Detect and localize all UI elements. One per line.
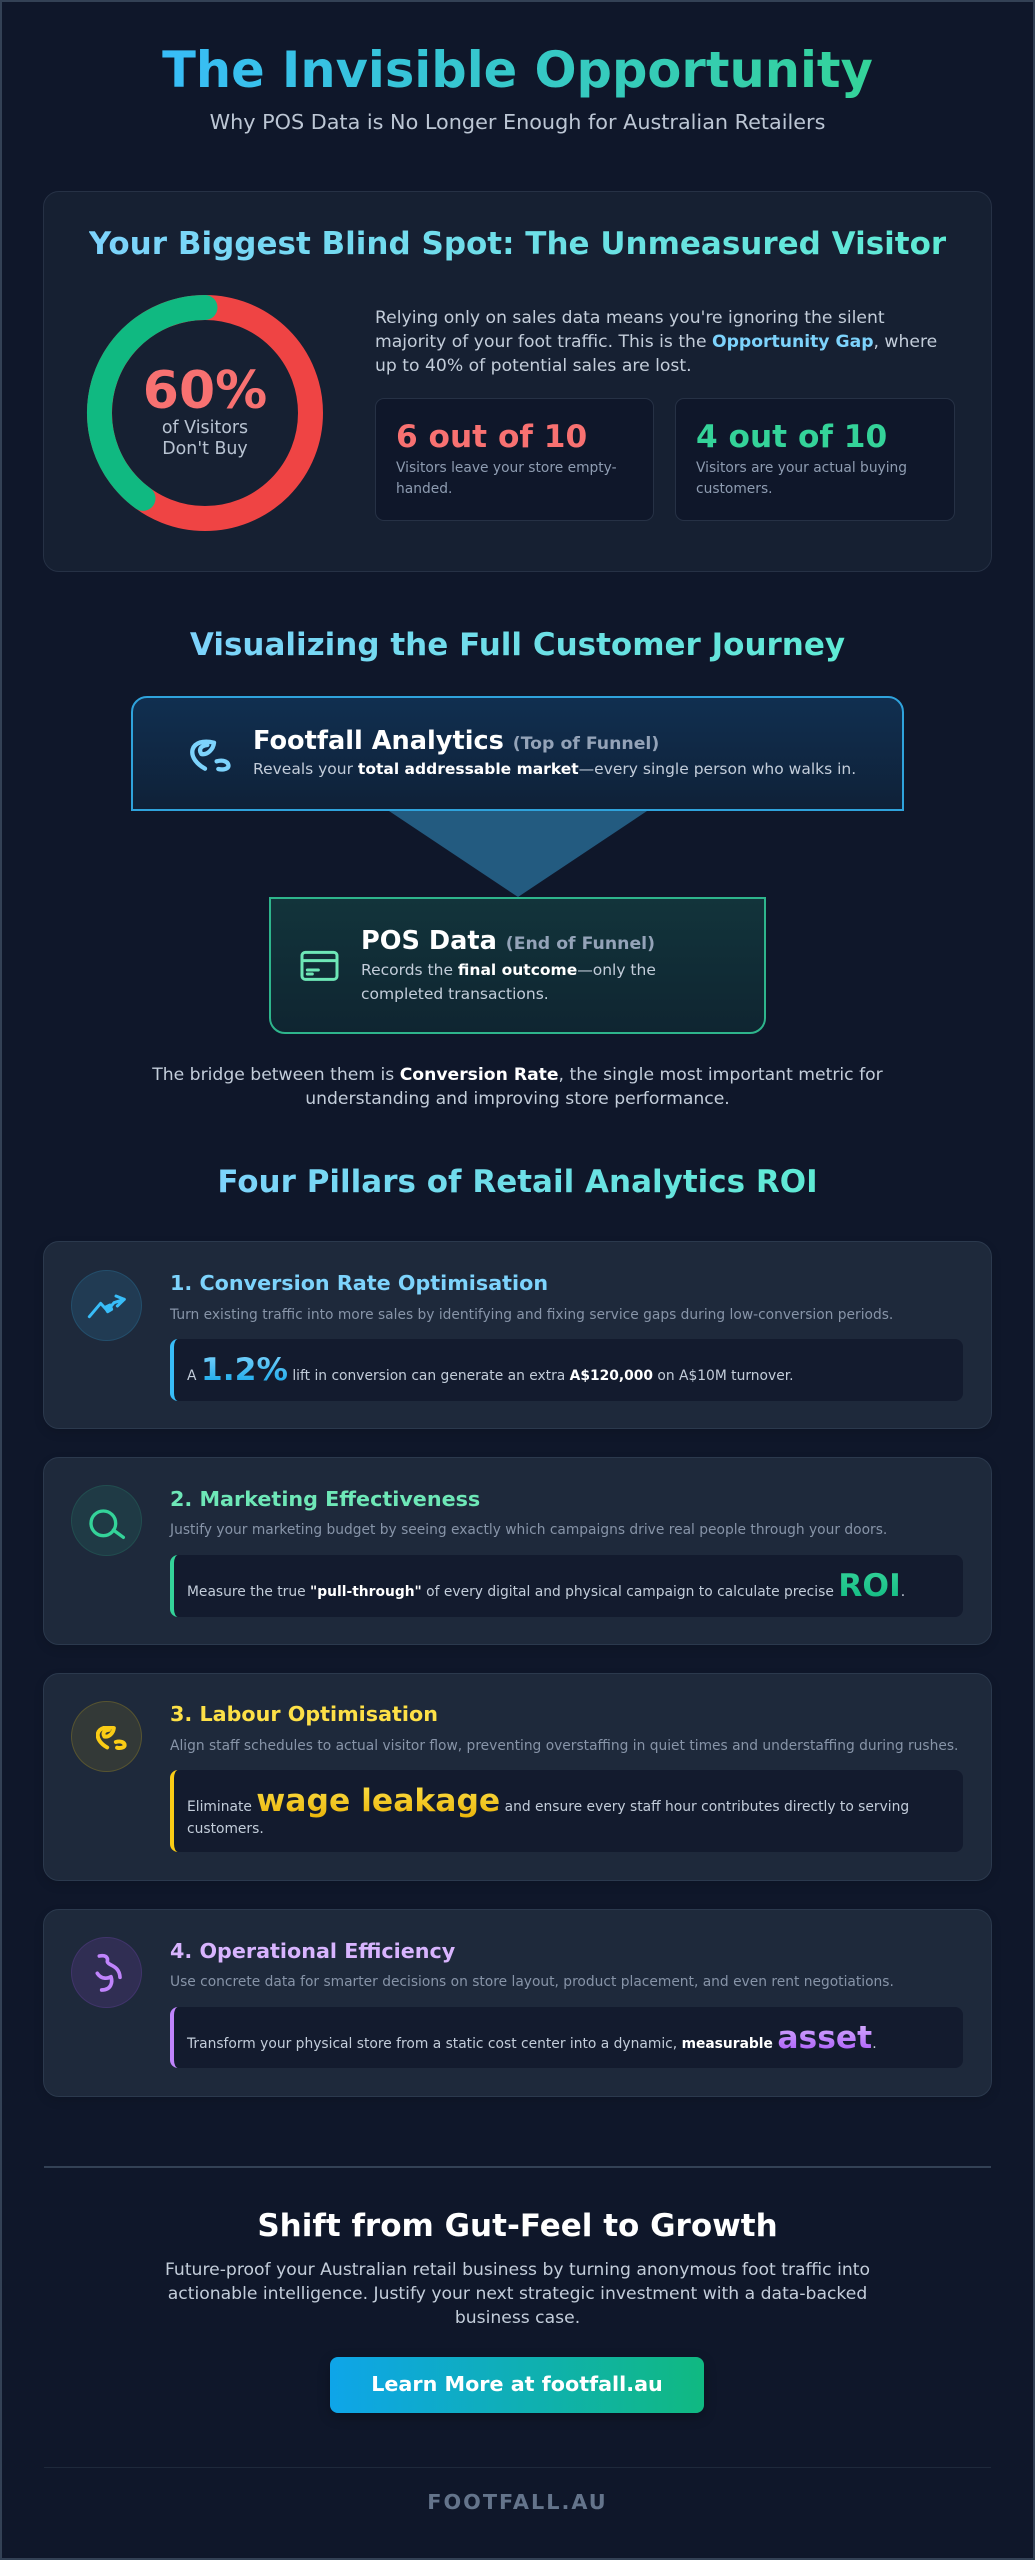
stat note: buying customers: Visitors are your actual buying	[696, 460, 907, 476]
donut chart	[86, 295, 323, 531]
heading: blind spot: Your Biggest Blind Spot: The Unmeasured Visitor	[89, 226, 946, 262]
heading: customer journey: Visualizing the Full Customer Journey	[190, 627, 845, 663]
icon: trend up	[88, 1294, 126, 1318]
pillar 3 icon circle	[71, 1701, 142, 1772]
pillar 1 icon circle	[71, 1270, 142, 1341]
stat card: 6 out of 10	[375, 398, 654, 521]
pillar 2 icon circle	[71, 1485, 142, 1556]
pillar 2 title: 2. Marketing Effectiveness	[170, 1487, 480, 1511]
panel: blind spot	[43, 191, 992, 572]
button	[330, 2357, 704, 2413]
footer brand: FOOTFALL.AU	[427, 2490, 608, 2514]
bridge text: The bridge between them is Conversion Rate, the single most important metric for	[152, 1065, 883, 1085]
funnel top description: Reveals your total addressable market—every single person who walks in.	[253, 760, 856, 778]
heading: four pillars: Four Pillars of Retail Analytics ROI	[217, 1164, 818, 1200]
donut label: of Visitors	[162, 418, 248, 438]
pillar 1 title: 1. Conversion Rate Optimisation	[170, 1271, 548, 1295]
button: Learn More at footfall.au	[371, 2372, 663, 2396]
icon: route	[95, 1954, 122, 1992]
pillar 3 title: 3. Labour Optimisation	[170, 1702, 438, 1726]
bridge text	[152, 1065, 883, 1109]
pillar 2 callout text: Measure the true "pull-through" of every digital and physical campaign to calculate precise ROI.	[187, 1568, 905, 1604]
closing paragraph: business case.	[455, 2308, 580, 2328]
pillar 4 description: Use concrete data for smarter decisions on store layout, product placement, and even rent negotiations.	[170, 1974, 894, 1990]
funnel bottom description	[361, 961, 656, 1003]
stat card: 4 out of 10	[675, 398, 955, 521]
funnel top: footfall analytics	[131, 696, 904, 811]
pillar 4 callout box	[170, 2007, 963, 2068]
closing paragraph: actionable intelligence. Justify your next strategic investment with a data-backed	[168, 2284, 867, 2304]
pillar 1 callout box	[170, 1339, 963, 1401]
pillar 3 callout text	[187, 1783, 909, 1837]
funnel top title: Footfall Analytics (Top of Funnel)	[253, 726, 659, 756]
pillar 3 card	[43, 1673, 992, 1881]
pillar 3 callout box	[170, 1770, 963, 1852]
intro paragraph	[375, 308, 937, 376]
funnel bottom description: Records the final outcome—only the	[361, 961, 656, 979]
intro paragraph: up to 40% of potential sales are lost.	[375, 356, 692, 376]
pillar 4 title: 4. Operational Efficiency	[170, 1939, 455, 1963]
stat value: 6 out of 10: 6 out of 10	[396, 419, 587, 455]
pillar 4 callout text: Transform your physical store from a static cost center into a dynamic, measurable asset.	[187, 2020, 877, 2056]
icon: footprints	[190, 740, 231, 772]
bridge text: understanding and improving store performance.	[305, 1089, 730, 1109]
stat note: empty-handed: handed.	[396, 481, 452, 497]
stat note: empty-handed: Visitors leave your store empty-	[396, 460, 617, 476]
closing paragraph	[165, 2260, 870, 2328]
pillar 2 callout box	[170, 1555, 963, 1617]
icon: credit card	[300, 950, 338, 981]
subtitle: Why POS Data is No Longer Enough for Australian Retailers	[210, 110, 825, 134]
pillar 2 card	[43, 1457, 992, 1645]
stat value: 4 out of 10: 4 out of 10	[696, 419, 887, 455]
icon: footprints yellow	[96, 1726, 127, 1750]
funnel arrow	[389, 811, 647, 897]
donut value: 60%	[143, 361, 267, 421]
donut label	[162, 418, 248, 459]
closing paragraph: Future-proof your Australian retail business by turning anonymous foot traffic into	[165, 2260, 870, 2280]
intro paragraph: Relying only on sales data means you're ignoring the silent	[375, 308, 885, 328]
intro paragraph: majority of your foot traffic. This is the Opportunity Gap, where	[375, 332, 937, 352]
stat note: empty-handed	[396, 460, 617, 497]
stat note: buying customers: customers.	[696, 481, 773, 497]
pillar 1 card	[43, 1241, 992, 1429]
funnel bottom description: completed transactions.	[361, 985, 549, 1003]
funnel bottom: POS data	[269, 897, 766, 1034]
title: The Invisible Opportunity	[162, 41, 873, 99]
pillar 3 description: Align staff schedules to actual visitor flow, preventing overstaffing in quiet times and understaffing during rushes.	[170, 1738, 958, 1754]
pillar 2 description: Justify your marketing budget by seeing exactly which campaigns drive real people through your doors.	[170, 1522, 887, 1538]
pillar 4 icon circle	[71, 1937, 142, 2008]
funnel bottom title: POS Data (End of Funnel)	[361, 926, 655, 956]
pillar 4 card	[43, 1909, 992, 2097]
stat note: buying customers	[696, 460, 907, 497]
pillar 3 callout text: customers.	[187, 1821, 264, 1837]
closing heading: Shift from Gut-Feel to Growth	[257, 2208, 778, 2244]
pillar 1 callout text: A 1.2% lift in conversion can generate an extra A$120,000 on A$10M turnover.	[187, 1352, 794, 1388]
pillar 1 description: Turn existing traffic into more sales by identifying and fixing service gaps during low-conversion periods.	[170, 1307, 893, 1323]
icon: magnifier	[89, 1509, 126, 1540]
pillar 3 callout text: Eliminate wage leakage and ensure every staff hour contributes directly to serving	[187, 1783, 909, 1819]
donut label: Don't Buy	[162, 439, 248, 459]
